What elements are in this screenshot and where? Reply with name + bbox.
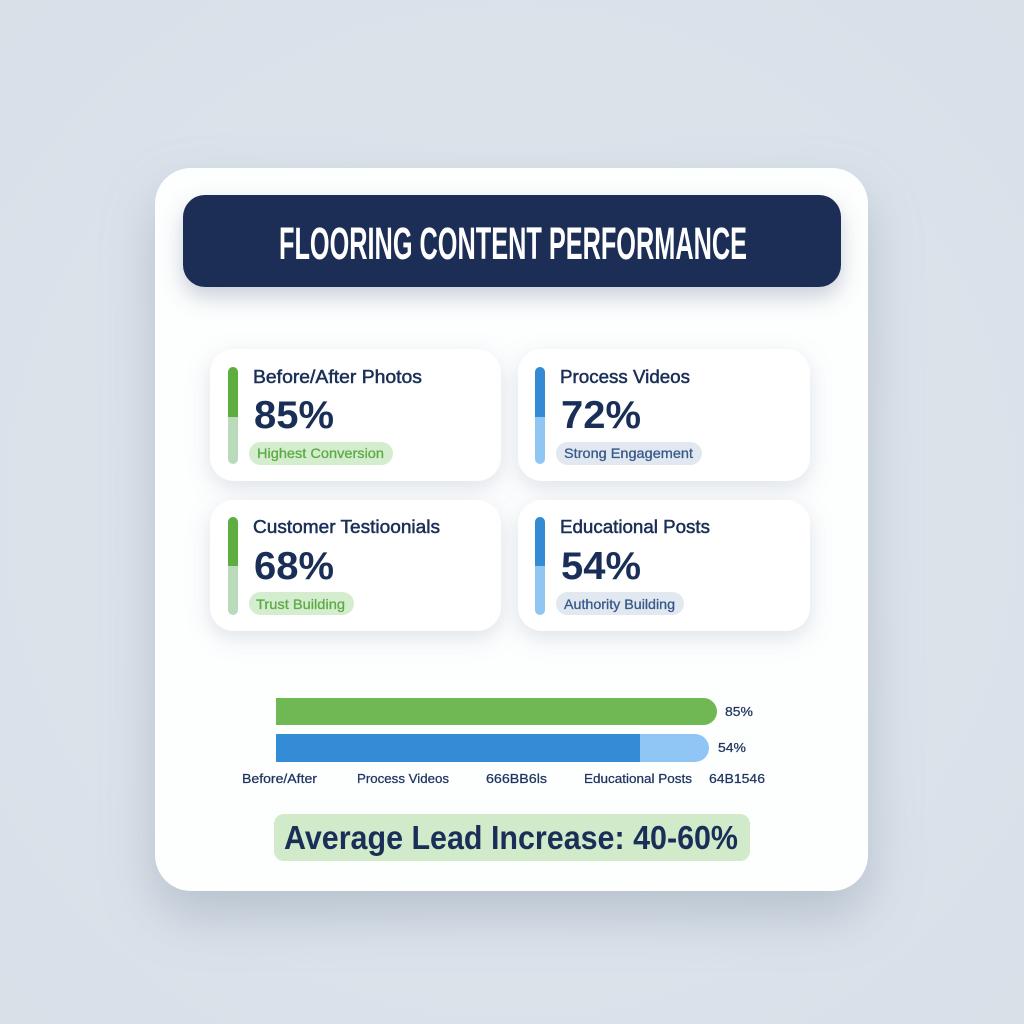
panel: customer testimonials: Customer Testioonials bbox=[253, 517, 440, 537]
bar chart: 54% bbox=[718, 740, 746, 755]
bar chart: 64B1546 bbox=[709, 771, 765, 786]
panel: customer testimonials: Trust Building bbox=[256, 596, 345, 612]
bar chart: Before/After bbox=[242, 771, 318, 786]
panel: before/after photos: Before/After Photos bbox=[253, 367, 422, 387]
panel: process videos: Process Videos bbox=[560, 367, 690, 387]
bar chart: 666BB6ls bbox=[486, 771, 548, 786]
panel: before/after photos: Highest Conversion bbox=[257, 445, 384, 461]
panel: educational posts bbox=[518, 500, 810, 631]
panel: main card bbox=[155, 168, 868, 891]
panel: customer testimonials: 68% bbox=[254, 545, 334, 588]
header banner bbox=[183, 195, 841, 287]
panel: before/after photos: 85% bbox=[254, 394, 334, 437]
panel: customer testimonials bbox=[210, 500, 501, 631]
bar chart: 85% bbox=[725, 704, 753, 719]
panel: educational posts: 54% bbox=[561, 545, 641, 588]
bar chart bbox=[242, 698, 765, 786]
panel: process videos bbox=[518, 349, 810, 481]
panel: educational posts: Educational Posts bbox=[560, 517, 710, 537]
bar chart: Process Videos bbox=[357, 771, 450, 786]
callout: Average Lead Increase: 40-60% bbox=[284, 819, 738, 856]
panel: process videos: Strong Engagement bbox=[564, 445, 693, 461]
bar chart: Educational Posts bbox=[584, 771, 693, 786]
panel: educational posts: Authority Building bbox=[564, 596, 675, 612]
panel: before/after photos bbox=[210, 349, 501, 481]
panel: process videos: 72% bbox=[561, 394, 641, 437]
